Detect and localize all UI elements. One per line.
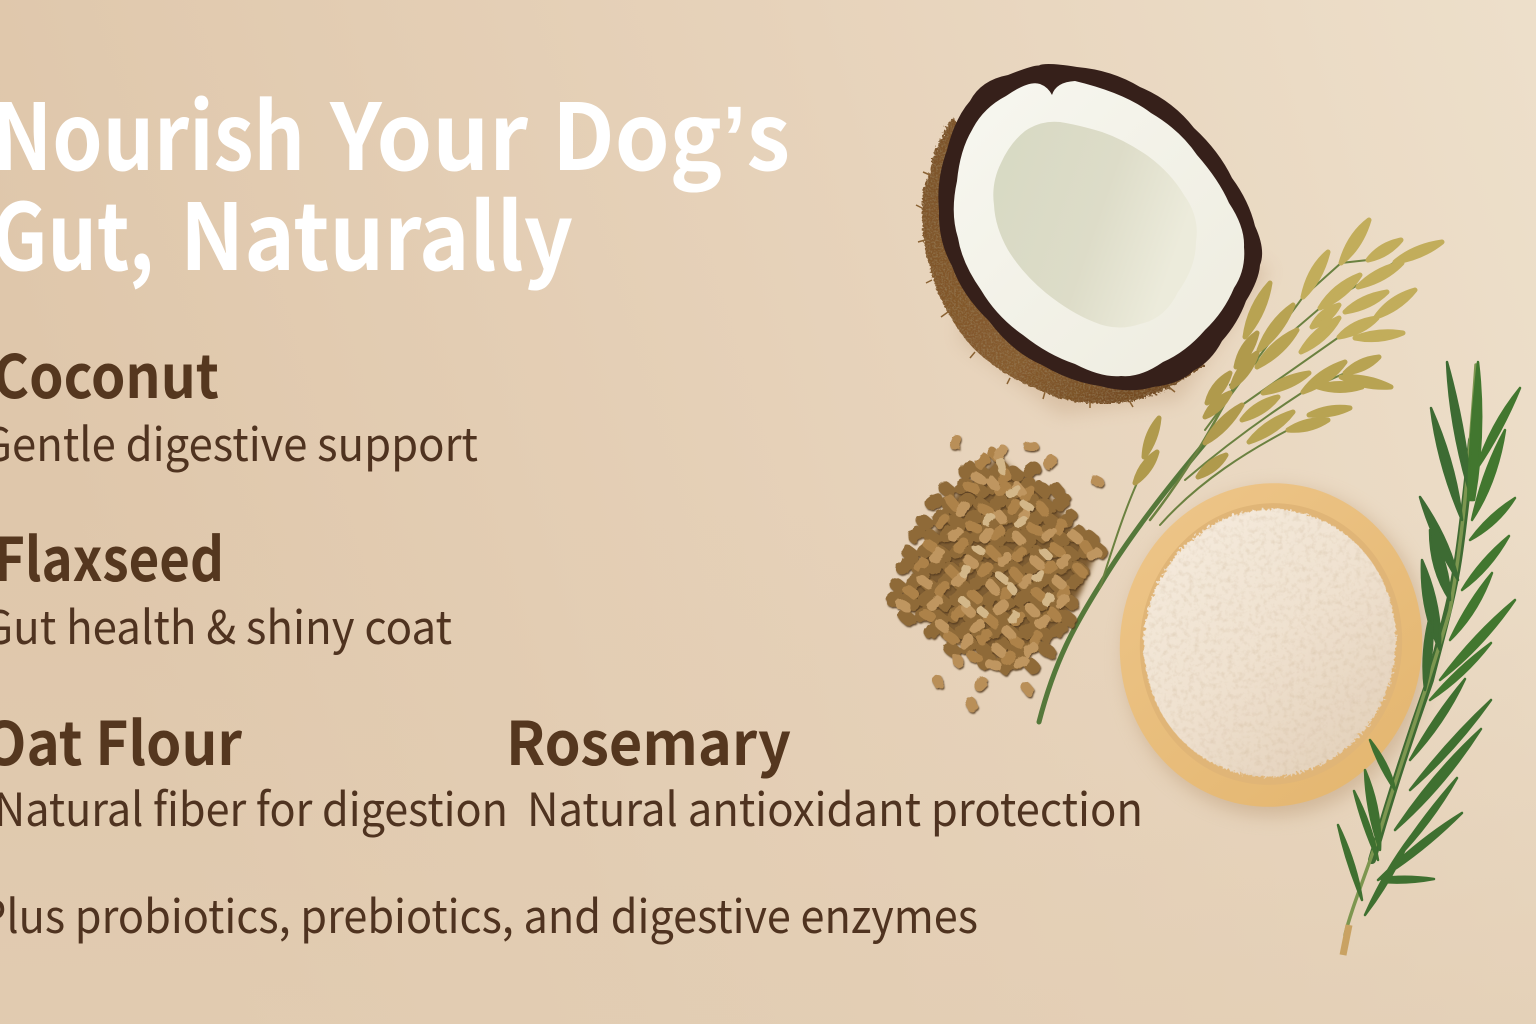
icon: rosemary sprig (1338, 362, 1520, 955)
text block: rosemary: Natural antioxidant protection (527, 774, 1143, 840)
title: Naturally (180, 164, 573, 297)
text block: coconut (0, 329, 478, 475)
icon: bowl of oat flour (1099, 464, 1449, 836)
text block: rosemary: Rosemary (506, 696, 791, 783)
title (0, 64, 790, 297)
icon: oat sprig (1039, 220, 1442, 722)
icon: flaxseed pile (892, 440, 1101, 707)
title: Your (329, 64, 529, 197)
text block: coconut: Coconut (0, 329, 219, 416)
footnote text: Plus probiotics, prebiotics, and digestive enzymes (0, 881, 978, 947)
title: Nourish (0, 64, 305, 197)
text block: flaxseed (0, 512, 452, 658)
text block: oat flour (0, 696, 508, 840)
icon: coconut half (916, 64, 1270, 415)
text block: oat flour: Natural fiber for digestion (0, 774, 508, 840)
title: Dog’s (552, 64, 790, 197)
text block: flaxseed: Flaxseed (0, 512, 224, 599)
text block: rosemary (506, 696, 1143, 840)
